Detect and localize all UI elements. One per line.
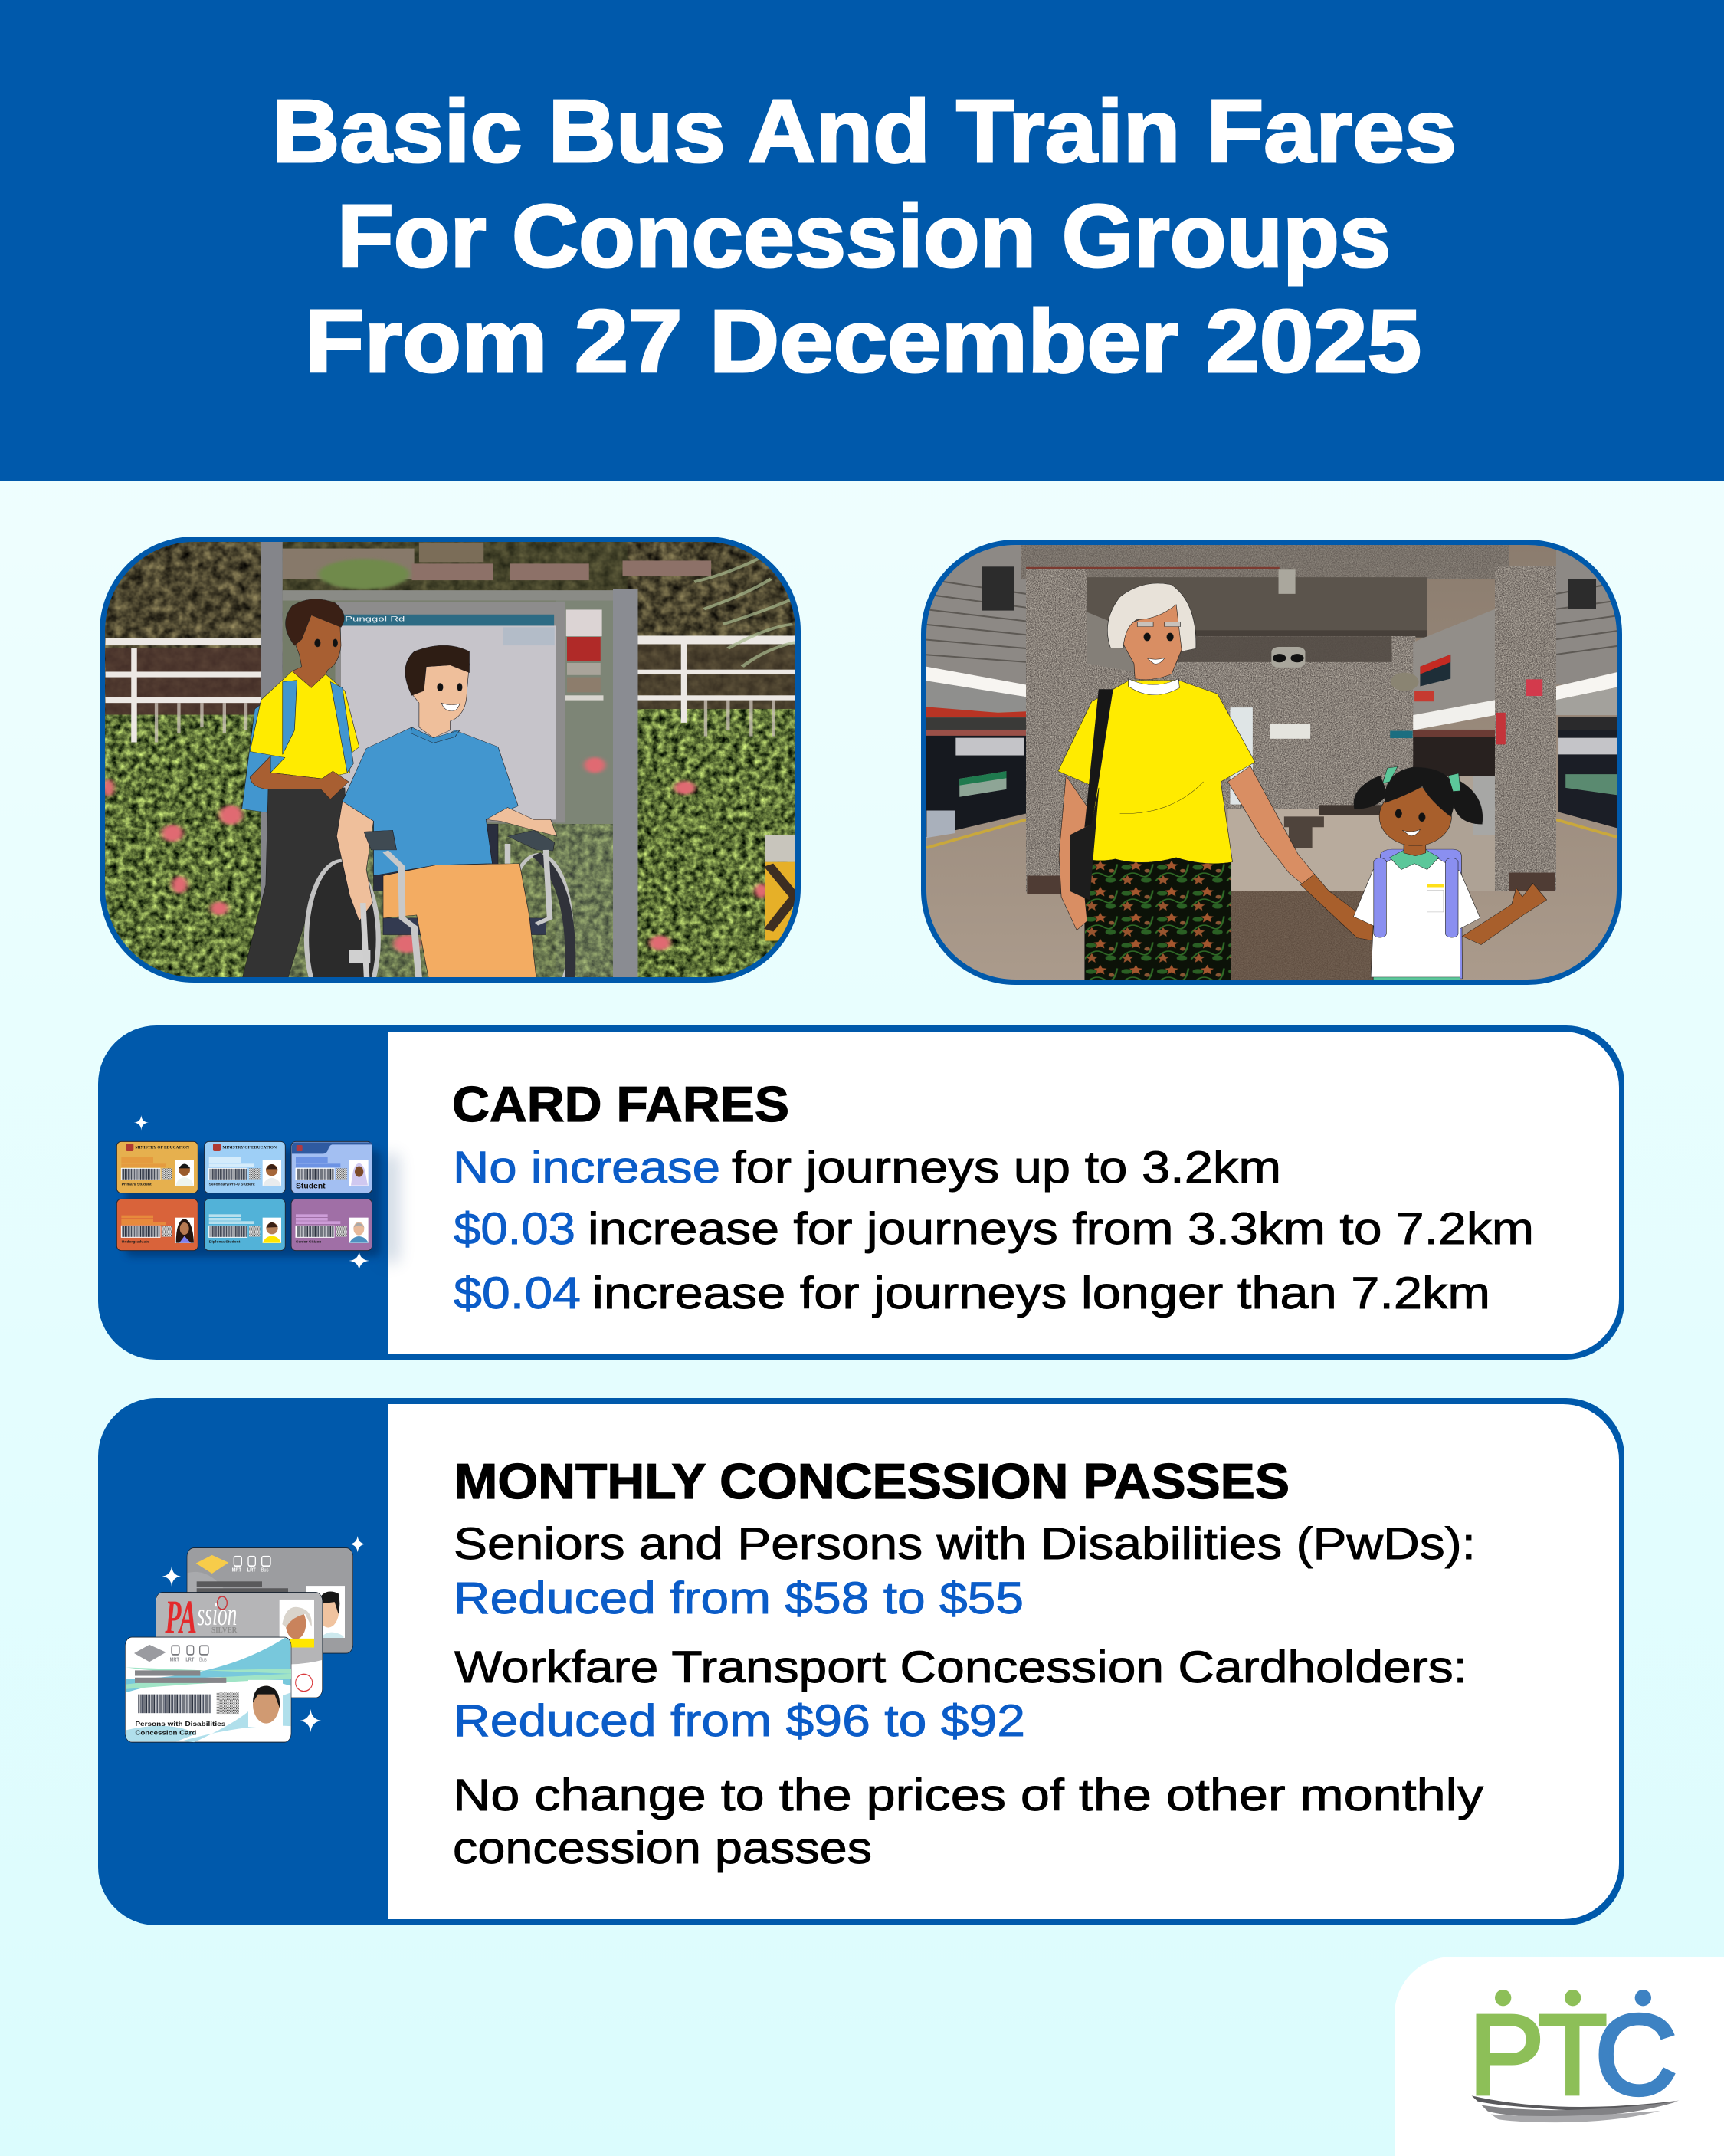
fare lines: increase for journeys from 3.3km to 7.2km <box>588 1204 1534 1254</box>
title: Basic Bus And Train Fares <box>272 81 1457 181</box>
logo: PTC <box>1469 1990 1680 2122</box>
primary student card: Primary Student <box>122 1183 152 1186</box>
persons with disabilities concession card: MRT <box>170 1657 180 1663</box>
back grey card: Bus <box>261 1567 269 1574</box>
PAssion Silver card: PA <box>165 1590 197 1643</box>
diploma student card <box>205 1199 285 1251</box>
senior woman in yellow shirt <box>1058 583 1317 985</box>
photo panel: MRT platform with senior and child <box>918 543 1622 985</box>
title: For Concession Groups <box>337 186 1391 286</box>
no change note: concession passes <box>453 1823 872 1873</box>
student card: Student <box>296 1183 326 1191</box>
secondary student card: Secondary/Pre-U Student <box>209 1183 255 1186</box>
bus stop background: Punggol Rd <box>345 615 405 623</box>
heading: card fares: CARD FARES <box>452 1076 789 1132</box>
train station background <box>918 543 1622 985</box>
panel: monthly concession passes <box>98 1398 1624 1925</box>
title: From 27 December 2025 <box>305 291 1421 391</box>
persons with disabilities concession card: Bus <box>199 1657 207 1663</box>
panel background <box>98 1025 1624 1360</box>
diploma student card: Diploma Student <box>209 1240 241 1244</box>
panel: card fares <box>98 1025 1624 1360</box>
header band <box>0 0 1724 481</box>
logo: PTC: P <box>1469 1992 1545 2118</box>
student card <box>291 1141 372 1193</box>
seniors and PwDs pass <box>454 1519 1476 1623</box>
fare lines: $0.03 <box>454 1204 575 1254</box>
icon: stacked concession cards <box>125 1536 365 1742</box>
no change note: No change to the prices of the other monthly <box>453 1770 1483 1820</box>
icon: concession card grid <box>116 1115 398 1271</box>
seniors and PwDs pass: Seniors and Persons with Disabilities (PwDs): <box>454 1519 1476 1569</box>
fare lines: for journeys up to 3.2km <box>732 1143 1281 1193</box>
schoolgirl with backpack <box>1300 766 1547 982</box>
fare lines: $0.04 <box>454 1268 581 1318</box>
undergraduate card: Undergraduate <box>122 1240 149 1244</box>
workfare pass <box>454 1642 1467 1746</box>
back grey card <box>187 1548 353 1653</box>
seniors and PwDs pass: Reduced from $58 to $55 <box>454 1574 1024 1623</box>
back grey card: LRT <box>247 1567 256 1574</box>
fare lines: increase for journeys longer than 7.2km <box>592 1268 1490 1318</box>
PAssion Silver card: SILVER <box>211 1626 238 1635</box>
bus stop background <box>96 537 805 985</box>
logo: PTC: T <box>1538 1992 1608 2118</box>
senior citizen card <box>291 1199 372 1251</box>
heading: monthly concession passes: MONTHLY CONCESSION PASSES <box>454 1453 1290 1509</box>
student with backpack <box>242 599 359 980</box>
senior citizen card: Senior Citizen <box>296 1240 321 1244</box>
persons with disabilities concession card: Persons with Disabilities <box>135 1720 225 1728</box>
title <box>272 81 1457 391</box>
persons with disabilities concession card: LRT <box>185 1657 195 1663</box>
photo panel: bus stop with student and wheelchair user <box>96 537 805 1018</box>
logo: PTC: C <box>1595 1992 1677 2118</box>
back grey card: MRT <box>232 1567 242 1574</box>
wheelchair user <box>306 645 572 1018</box>
PAssion Silver card <box>156 1590 323 1698</box>
PAssion Silver card: ssion <box>197 1597 237 1633</box>
fare lines: No increase <box>453 1143 720 1193</box>
panel background <box>98 1398 1624 1925</box>
persons with disabilities concession card <box>125 1637 291 1742</box>
workfare pass: Workfare Transport Concession Cardholders: <box>454 1642 1467 1692</box>
primary student card: MINISTRY OF EDUCATION <box>135 1147 190 1150</box>
no change note <box>453 1770 1483 1873</box>
fare lines <box>453 1143 1534 1318</box>
secondary student card: MINISTRY OF EDUCATION <box>222 1147 277 1150</box>
undergraduate card <box>116 1199 198 1251</box>
sparkles <box>162 1536 365 1732</box>
primary student card <box>116 1141 198 1193</box>
secondary student card <box>205 1141 285 1193</box>
persons with disabilities concession card: Concession Card <box>135 1729 197 1737</box>
logo panel <box>1395 1957 1724 2156</box>
sparkles <box>134 1115 369 1271</box>
workfare pass: Reduced from $96 to $92 <box>454 1696 1025 1746</box>
